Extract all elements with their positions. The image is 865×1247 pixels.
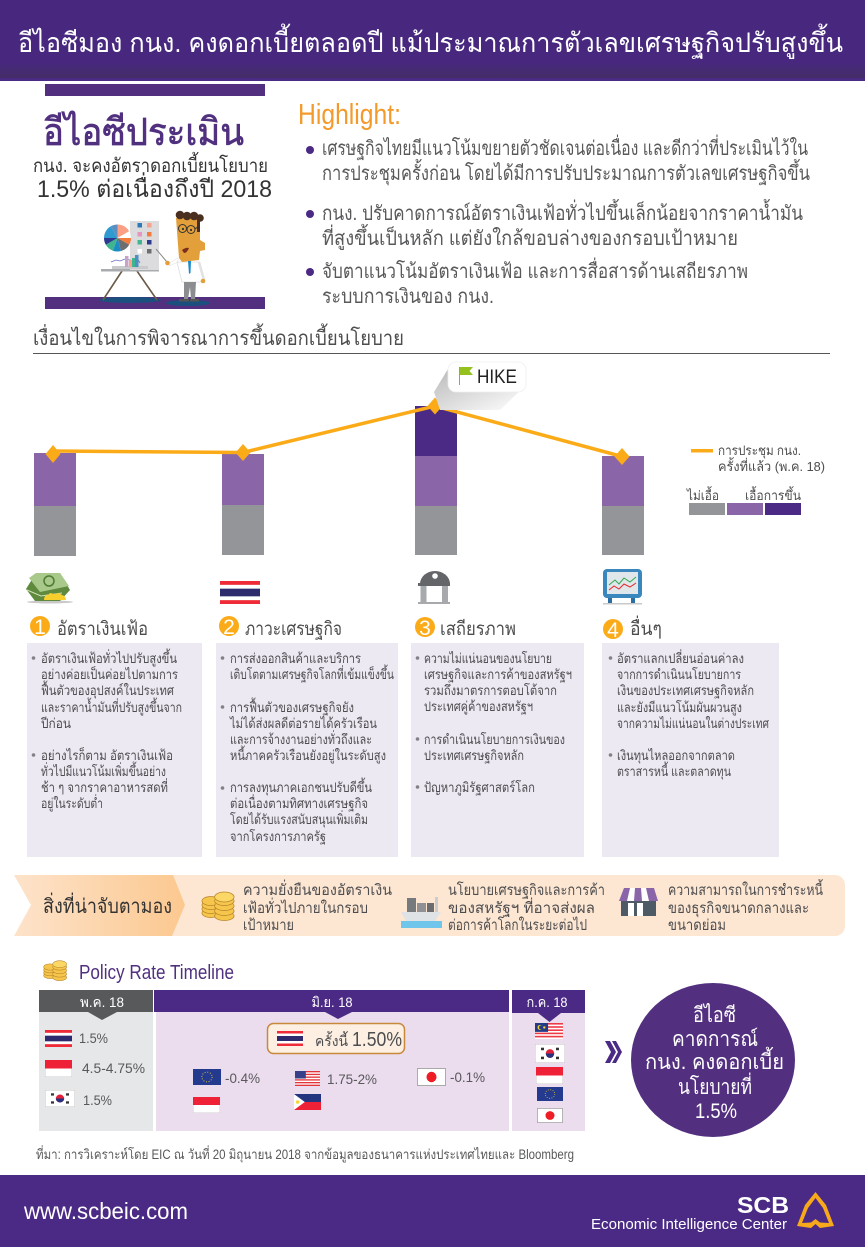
panel: economy text: หนี้ภาคครัวเรือนยังอยู่ในระดับสูง	[230, 745, 386, 764]
icon: money	[26, 573, 73, 604]
watch item 2: ของสหรัฐฯ ที่อาจส่งผล	[448, 897, 595, 917]
timeline: July 18	[512, 990, 585, 1131]
flag: Thailand	[45, 1030, 72, 1047]
column: economy	[216, 581, 398, 857]
callout: HIKE	[434, 362, 526, 410]
panel: economy text	[216, 643, 398, 857]
bar: inflation	[34, 453, 76, 556]
icon: cargo ship	[401, 897, 442, 928]
heading: economy: ภาวะเศรษฐกิจ	[245, 619, 342, 640]
flag: EU	[537, 1087, 563, 1101]
panel: inflation text: อัตราเงินเฟ้อทั่วไปปรับสูงขึ้น	[41, 648, 177, 667]
legend: ไม่เอื้อ	[686, 486, 719, 503]
callout: this meeting rate: 1.50%	[352, 1029, 402, 1051]
flag: EU	[193, 1069, 221, 1085]
heading: stability	[415, 617, 516, 640]
bar: economy	[222, 454, 264, 555]
heading: others: อื่นๆ	[630, 615, 662, 640]
timeline: July 18: ก.ค. 18	[526, 994, 568, 1010]
watch item 2: ต่อการค้าโลกในระยะต่อไป	[448, 916, 587, 934]
timeline: May 18: 1.5%	[83, 1092, 112, 1108]
timeline: June 18: -0.4%	[225, 1070, 260, 1086]
highlight 2: ที่สูงขึ้นเป็นหลัก แต่ยังใกล้ขอบล่างของกรอบเป้าหมาย	[322, 224, 738, 251]
heading: inflation: 1	[34, 616, 46, 639]
timeline: June 18: มิ.ย. 18	[312, 994, 353, 1010]
line: previous meeting	[46, 398, 630, 465]
organisation name: SCB	[737, 1192, 789, 1218]
watch item 1: ความยั่งยืนของอัตราเงิน	[243, 879, 392, 899]
panel: inflation text: ฟื้นตัวของอุปสงค์ในประเทศ	[41, 680, 174, 699]
panel: economy text: การส่งออกสินค้าและบริการ	[230, 651, 361, 666]
watch item 1: เฟ้อทั่วไปภายในกรอบ	[243, 897, 368, 917]
watch item 3: ขนาดย่อม	[668, 917, 726, 934]
heading: others: 4	[607, 619, 619, 642]
icon: coins	[202, 892, 234, 920]
timeline: May 18	[39, 990, 153, 1131]
footer	[0, 1175, 865, 1247]
panel: stability text: ปัญหาภูมิรัฐศาสตร์โลก	[424, 779, 535, 796]
legend: เอื้อการขึ้น	[745, 486, 801, 503]
panel: stability text: ประเทศเศรษฐกิจหลัก	[424, 748, 524, 764]
forecast circle: อีไอซี	[693, 1003, 736, 1027]
panel: stability text: ประเทศคู่ค้าของสหรัฐฯ	[424, 699, 533, 715]
organisation name: Economic Intelligence Center	[591, 1216, 787, 1233]
heading: stability: เสถียรภาพ	[440, 618, 516, 640]
highlight 2	[306, 199, 803, 251]
panel: economy text: การลงทุนภาคเอกชนปรับดีขึ้น	[230, 777, 372, 796]
watch item 2: นโยบายเศรษฐกิจและการค้า	[448, 881, 605, 899]
panel: inflation text: อยู่ในระดับต่ำ	[41, 794, 103, 812]
icon: store	[619, 888, 658, 916]
flag: South Korea	[535, 1044, 565, 1063]
panel: inflation text: และราคาน้ำมันที่ปรับสูงขึ้นจาก	[41, 697, 182, 716]
panel: stability text	[411, 643, 584, 857]
panel: economy text: โดยได้รับแรงสนับสนุนเพิ่มเติม	[230, 810, 368, 828]
watch item 2	[448, 881, 605, 934]
arrow: to forecast	[605, 1041, 622, 1063]
timeline: June 18	[154, 990, 509, 1131]
highlight 3	[306, 257, 748, 308]
timeline: June 18: 1.75-2%	[327, 1071, 377, 1087]
icon: bank	[418, 571, 450, 604]
icon: presenter with board	[99, 211, 210, 306]
watch item 3: ของธุรกิจขนาดกลางและ	[668, 900, 809, 918]
timeline: May 18: 1.5%	[79, 1030, 108, 1046]
panel: others text: เงินของประเทศเศรษฐกิจหลัก	[617, 683, 754, 699]
heading: policy rate timeline	[44, 961, 234, 984]
heading: inflation	[30, 616, 148, 640]
flag: Philippines	[294, 1094, 321, 1110]
panel: others text: จากความไม่แน่นอนในต่างประเทศ	[617, 715, 769, 731]
panel: highlights	[298, 99, 810, 308]
flag: Indonesia	[193, 1097, 220, 1113]
forecast circle	[631, 983, 795, 1137]
heading: inflation: อัตราเงินเฟ้อ	[57, 619, 148, 640]
icon: chart monitor	[603, 569, 642, 604]
callout: HIKE: HIKE	[477, 367, 517, 388]
watch item 1: เป้าหมาย	[243, 917, 294, 934]
flag: Japan	[537, 1108, 563, 1123]
heading: others	[603, 615, 662, 642]
organisation name	[591, 1192, 789, 1233]
assessment text	[33, 152, 272, 203]
panel: others text: อัตราแลกเปลี่ยนอ่อนค่าลง	[617, 649, 744, 666]
forecast circle: กนง. คงดอกเบี้ย	[645, 1047, 784, 1074]
callout: this meeting rate: ครั้งนี้	[315, 1031, 348, 1049]
assessment text: กนง. จะคงอัตราดอกเบี้ยนโยบาย	[33, 152, 268, 177]
bar: others	[602, 456, 644, 555]
panel: others text: และยังมีแนวโน้มผันผวนสูง	[617, 699, 742, 716]
panel: economy text: การฟื้นตัวของเศรษฐกิจยัง	[230, 697, 354, 716]
icon: Thai flag	[220, 581, 260, 604]
panel: economy text: ต่อเนื่องตามทิศทางเศรษฐกิจ	[230, 794, 368, 812]
panel: things to watch	[14, 875, 845, 936]
callout: this meeting rate	[268, 1024, 404, 1054]
timeline: May 18: 4.5-4.75%	[82, 1060, 145, 1076]
heading: stability: 3	[419, 617, 431, 640]
panel: inflation text: อย่างค่อยเป็นค่อยไปตามการ	[41, 665, 178, 682]
flag: Indonesia	[45, 1060, 72, 1077]
panel: inflation text: ช้า ๆ จากราคาอาหารสดที่	[41, 778, 168, 795]
heading: Highlight: Highlight:	[298, 99, 401, 131]
watch item 3	[668, 879, 823, 934]
legend: ครั้งที่แล้ว (พ.ค. 18)	[718, 457, 825, 474]
header banner	[0, 0, 865, 81]
heading: economy: 2	[223, 616, 235, 639]
panel: inflation text: ทั่วไปมีแนวโน้มเพิ่มขึ้นอย่าง	[41, 761, 166, 779]
arrow heading	[14, 875, 185, 936]
panel: economy text: ไม่ได้ส่งผลดีต่อรายได้ครัวเรือน	[229, 716, 377, 731]
heading: policy rate timeline: Policy Rate Timeline	[79, 962, 234, 984]
panel heading: อีไอซีประเมิน	[43, 111, 244, 154]
panel: stability text: เศรษฐกิจและการค้าของสหรัฐฯ	[424, 667, 572, 683]
legend	[686, 443, 825, 515]
panel: inflation text	[27, 643, 202, 857]
flag: Malaysia	[535, 1023, 563, 1039]
bar: stability	[415, 406, 457, 555]
watch item 3: ความสามารถในการชำระหนี้	[668, 879, 823, 899]
chart: policy condition stacked bars	[34, 362, 825, 556]
forecast circle: คาดการณ์	[672, 1027, 758, 1051]
panel: stability text: ความไม่แน่นอนของนโยบาย	[424, 650, 552, 666]
timeline: May 18: พ.ค. 18	[80, 994, 124, 1010]
highlight 3: ระบบการเงินของ กนง.	[322, 286, 494, 308]
panel: others text: จากการดำเนินนโยบายการ	[617, 666, 741, 682]
heading: economy	[219, 616, 342, 640]
column: others	[602, 569, 779, 857]
panel: economy text: เติบโตตามเศรษฐกิจโลกที่เข้มแข็งขึ้น	[230, 664, 394, 683]
section heading: policy conditions: เงื่อนไขในการพิจารณาการขึ้นดอกเบี้ยนโยบาย	[33, 323, 404, 350]
timeline: June 18: -0.1%	[450, 1069, 485, 1085]
forecast circle: 1.5%	[695, 1100, 737, 1123]
panel: economy text: จากโครงการภาครัฐ	[230, 828, 326, 845]
flag: Indonesia	[536, 1067, 563, 1084]
website: www.scbeic.com	[23, 1198, 188, 1224]
panel: EIC assessment	[33, 84, 272, 309]
column: inflation	[26, 573, 202, 857]
panel: inflation text: ปีก่อน	[40, 716, 71, 731]
panel: others text: เงินทุนไหลออกจากตลาด	[617, 748, 735, 764]
flag: South Korea	[45, 1090, 75, 1107]
panel: inflation text: อย่างไรก็ตาม อัตราเงินเฟ้อ	[41, 746, 173, 763]
highlight 3: จับตาแนวโน้มอัตราเงินเฟ้อ และการสื่อสารด้านเสถียรภาพ	[322, 257, 748, 283]
icon: SCB logo	[797, 1192, 834, 1228]
flag: USA	[295, 1071, 320, 1086]
assessment text: 1.5% ต่อเนื่องถึงปี 2018	[37, 172, 272, 203]
panel: others text: ตราสารหนี้ และตลาดทุน	[617, 761, 731, 780]
forecast circle: นโยบายที่	[678, 1072, 752, 1099]
column: stability	[411, 571, 584, 857]
watch item 1	[243, 879, 392, 934]
source note: ที่มา: การวิเคราะห์โดย EIC ณ วันที่ 20 มิถุนายน 2018 จากข้อมูลของธนาคารแห่งประเทศไทยและ Bloomberg	[36, 1145, 574, 1163]
legend: การประชุม กนง.	[718, 443, 801, 459]
panel: economy text: และการจ้างงานอย่างทั่วถึงและ	[230, 730, 372, 747]
panel: stability text: การดำเนินนโยบายการเงินของ	[424, 731, 565, 747]
flag: Japan	[417, 1068, 446, 1086]
panel: others text	[602, 643, 779, 857]
highlight 1	[306, 134, 810, 186]
panel: stability text: รวมถึงมาตรการตอบโต้จาก	[424, 682, 557, 698]
arrow heading: สิ่งที่น่าจับตามอง	[43, 892, 172, 918]
